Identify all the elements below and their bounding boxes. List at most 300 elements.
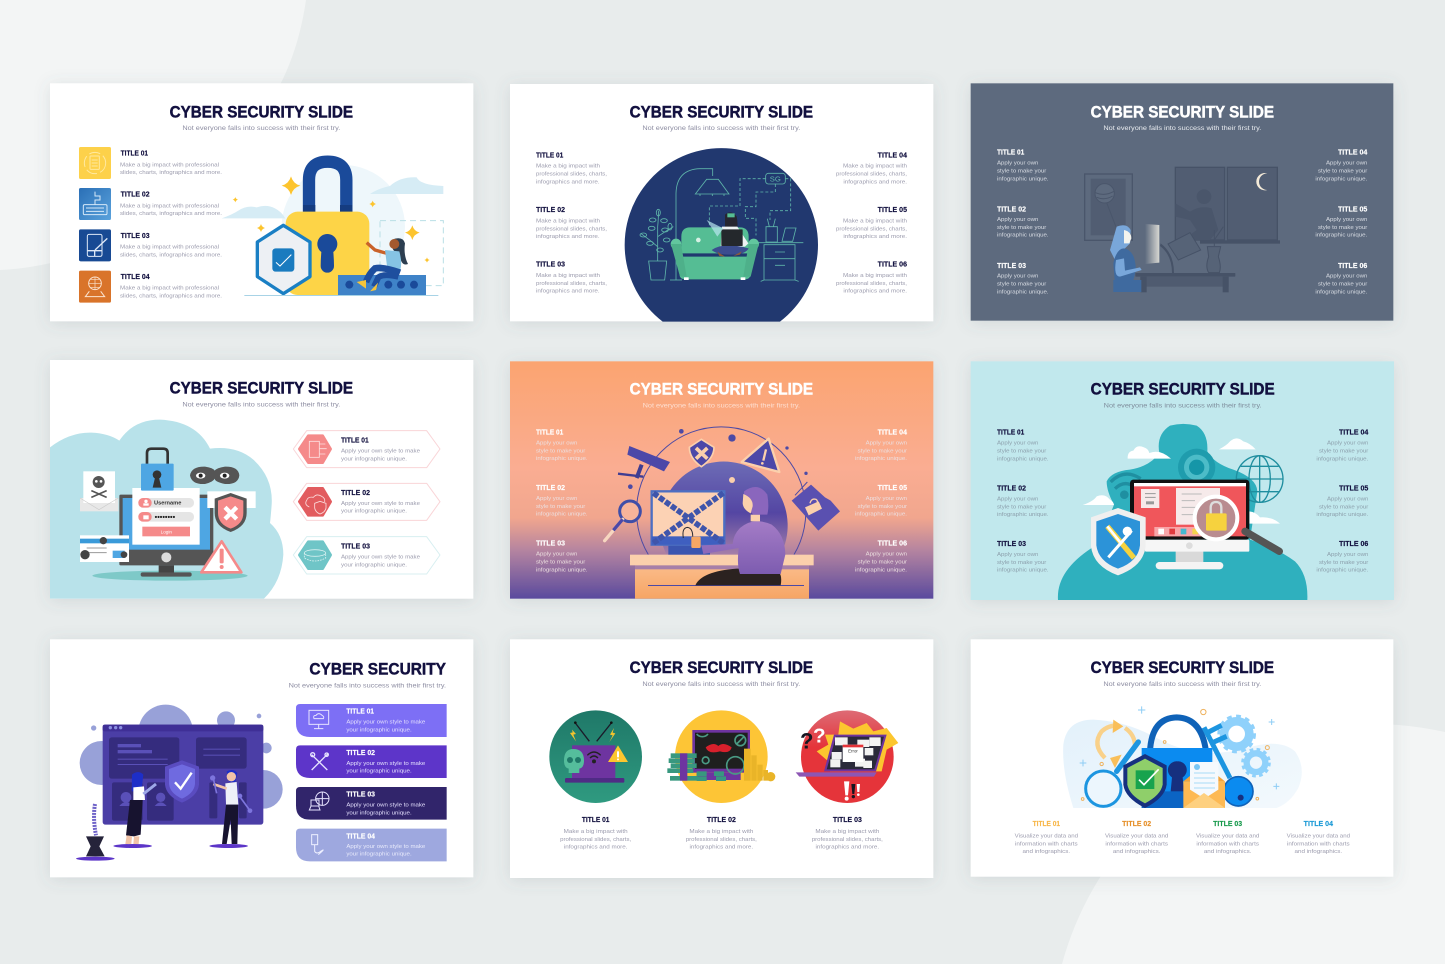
- item 03: style to make your: [536, 560, 585, 566]
- column 1 text: [1015, 819, 1078, 855]
- item 03: Make a big impact with: [536, 273, 600, 279]
- padlock shackle: [309, 162, 346, 213]
- item 8-3 text: [812, 815, 883, 851]
- bar 2 text: [346, 748, 425, 775]
- item 8-1 text: [560, 815, 632, 851]
- item 05: [1315, 204, 1368, 239]
- illustration: monitor and hacker silhouette: [1058, 424, 1307, 600]
- item 2 text: slides, charts, infographics and more.: [120, 211, 222, 217]
- item 05: infographics and more.: [843, 234, 907, 240]
- item 03: [536, 260, 607, 295]
- item 1 text: slides, charts, infographics and more.: [120, 170, 222, 176]
- item 05: TITLE 05: [878, 483, 907, 492]
- item 01: style to make your: [536, 448, 585, 454]
- column 2 text: [1105, 819, 1168, 855]
- padlock: [141, 449, 174, 491]
- item 01: [997, 427, 1049, 462]
- security camera: [618, 446, 670, 478]
- left text column: [997, 427, 1049, 574]
- item 02: infographic unique.: [997, 233, 1049, 239]
- item 01: infographics and more.: [536, 179, 600, 185]
- bar 4 text: Apply your own style to make: [346, 844, 425, 850]
- item 05: style to make your: [1319, 504, 1368, 510]
- bar 2 text: Apply your own style to make: [346, 761, 425, 767]
- panel 5: orange gradient locked computer slide: [510, 361, 933, 599]
- item 03: infographic unique.: [536, 567, 588, 573]
- column 4 text: [1287, 819, 1350, 855]
- item 05: infographic unique.: [855, 512, 907, 518]
- item 06: style to make your: [1318, 282, 1367, 288]
- column 1 text: and infographics.: [1022, 849, 1071, 855]
- bar 4 text: your infographic unique.: [346, 852, 412, 858]
- desk: [1135, 243, 1235, 292]
- item 06: [836, 260, 907, 295]
- item 02: TITLE 02: [997, 483, 1026, 492]
- item 4 text: Make a big impact with professional: [120, 286, 219, 292]
- cycle arrows: [1097, 725, 1135, 758]
- warning triangle: [201, 541, 241, 572]
- panel 3 title: CYBER SECURITY SLIDE: [1091, 102, 1274, 121]
- item 03: Apply your own: [997, 274, 1038, 280]
- item 01: style to make your: [997, 449, 1046, 455]
- panel 8: three circles slide: [510, 639, 933, 878]
- glowing screen: [1145, 224, 1159, 264]
- card 2 text: Apply your own style to make: [341, 501, 420, 507]
- man with pointer: [209, 770, 252, 848]
- column 1 text: information with charts: [1015, 841, 1078, 847]
- icon: crossed tools: [311, 753, 328, 770]
- item 8-3 text: Make a big impact with: [815, 829, 879, 835]
- item 06: infographics and more.: [843, 289, 907, 295]
- card 1 text: your infographic unique.: [341, 456, 407, 462]
- icon: tablet and pen: [79, 229, 111, 261]
- item 8-2 text: infographics and more.: [689, 845, 754, 851]
- item 03: style to make your: [997, 560, 1046, 566]
- column 2 text: TITLE 02: [1122, 819, 1151, 828]
- crossed chains: [653, 493, 723, 543]
- bar 1 text: [346, 706, 425, 733]
- item 1 text: [120, 149, 222, 176]
- card 3 text: TITLE 03: [341, 542, 370, 551]
- circle 1: infected router: [549, 710, 642, 803]
- panel 7: purple dashboard slide: [50, 639, 473, 877]
- card 3 text: [341, 542, 420, 568]
- item 02: infographic unique.: [997, 512, 1049, 518]
- panel 8 subtitle: Not everyone falls into success with their first try.: [642, 681, 800, 688]
- item 01: Apply your own: [536, 440, 577, 446]
- warning triangle: [742, 439, 779, 472]
- card 2 text: your infographic unique.: [341, 509, 407, 515]
- icon: globe hologram: [79, 271, 111, 303]
- left text column: [536, 427, 588, 573]
- item 02: professional slides, charts,: [536, 226, 607, 232]
- panel 9: blue padlock and key slide: [971, 639, 1393, 877]
- item 05: TITLE 05: [878, 205, 907, 214]
- left text column: [997, 148, 1049, 295]
- item 05: TITLE 05: [1339, 483, 1368, 492]
- item 01: TITLE 01: [536, 427, 563, 436]
- column 3 text: Visualize your data and: [1196, 833, 1259, 839]
- panel 6: teal silhouette monitor slide: [971, 361, 1394, 600]
- item 04: professional slides, charts,: [836, 172, 907, 178]
- item 03: Apply your own: [997, 552, 1038, 558]
- bar 1: [296, 704, 447, 737]
- item 05: professional slides, charts,: [836, 226, 907, 232]
- panel 2: woman on sofa slide: [510, 84, 933, 322]
- illustration: dashboard with people: [76, 705, 283, 861]
- infected card: [80, 535, 129, 562]
- panel 3 subtitle: Not everyone falls into success with their first try.: [1103, 125, 1261, 132]
- potted plant: [76, 804, 115, 861]
- item 06: Apply your own: [1326, 274, 1367, 280]
- column 3 text: TITLE 03: [1213, 819, 1242, 828]
- column 2 text: information with charts: [1105, 841, 1168, 847]
- panel 1 title: CYBER SECURITY SLIDE: [170, 102, 353, 121]
- item 06: Apply your own: [1327, 552, 1368, 558]
- item 2 text: Make a big impact with professional: [120, 203, 219, 209]
- item 02: infographics and more.: [536, 234, 600, 240]
- item 04: infographic unique.: [1316, 456, 1369, 462]
- item 02: infographic unique.: [536, 512, 588, 518]
- item 04: infographic unique.: [1315, 176, 1368, 182]
- padlock body: [286, 212, 369, 295]
- column 3 text: information with charts: [1196, 841, 1259, 847]
- item 2 text: TITLE 02: [121, 190, 150, 199]
- item 05: Apply your own: [1326, 217, 1367, 223]
- illustration: chained computer: [605, 427, 840, 599]
- card 1 text: Apply your own style to make: [341, 449, 420, 455]
- item 03: TITLE 03: [536, 260, 565, 269]
- item 06: professional slides, charts,: [836, 281, 907, 287]
- item 06: TITLE 06: [1339, 539, 1368, 548]
- item 8-2 text: [686, 815, 757, 851]
- woman with laptop: [707, 212, 749, 257]
- item 04: Apply your own: [1327, 441, 1368, 447]
- bar 3 text: TITLE 03: [346, 790, 375, 799]
- item 02: Apply your own: [997, 496, 1038, 502]
- picture frame: [1085, 174, 1132, 240]
- right text column: [1315, 148, 1368, 295]
- circle 3: error laptop: [796, 710, 898, 803]
- shield with check: [165, 760, 199, 803]
- bar 1 text: your infographic unique.: [346, 727, 412, 733]
- bar 1 text: Apply your own style to make: [346, 720, 425, 726]
- shield with tools: [1091, 508, 1146, 575]
- column 2 text: Visualize your data and: [1105, 833, 1168, 839]
- item 02: TITLE 02: [536, 205, 565, 214]
- panel 4 subtitle: Not everyone falls into success with their first try.: [182, 402, 340, 409]
- item 04: style to make your: [1319, 449, 1368, 455]
- desk: [630, 555, 814, 599]
- bar 2 text: TITLE 02: [346, 748, 375, 757]
- item 1 text: TITLE 01: [121, 149, 148, 158]
- column 4 text: TITLE 04: [1304, 819, 1334, 828]
- item 01: TITLE 01: [997, 427, 1024, 436]
- item 3 text: TITLE 03: [121, 231, 150, 240]
- panel 4: login and threats slide: [50, 360, 473, 599]
- password bar: [338, 275, 426, 295]
- item 04: [836, 150, 908, 185]
- item 04: TITLE 04: [878, 427, 908, 436]
- item 01: infographic unique.: [997, 456, 1049, 462]
- item 4 text: TITLE 04: [121, 272, 151, 281]
- item 01: infographic unique.: [997, 176, 1049, 182]
- column 2 text: and infographics.: [1113, 849, 1161, 855]
- item 03: infographics and more.: [536, 289, 600, 295]
- item 06: TITLE 06: [878, 260, 907, 269]
- illustration: burglar at window: [1085, 167, 1280, 292]
- icon: document cycle: [79, 147, 111, 179]
- panel 6 subtitle: Not everyone falls into success with their first try.: [1104, 403, 1262, 410]
- item 01: style to make your: [997, 168, 1046, 174]
- burglar: [1175, 189, 1218, 240]
- item 04: Apply your own: [1326, 161, 1367, 167]
- card 2 text: TITLE 02: [341, 488, 370, 497]
- item 06: Make a big impact with: [843, 273, 907, 279]
- card 2: [293, 483, 440, 520]
- panel 1 subtitle: Not everyone falls into success with their first try.: [182, 125, 340, 132]
- item 1 text: Make a big impact with professional: [120, 162, 219, 168]
- card 1 text: [341, 436, 420, 462]
- item 8-3 text: TITLE 03: [833, 815, 862, 824]
- item 3 text: slides, charts, infographics and more.: [120, 252, 222, 258]
- circle 2: ransomware laptop: [667, 710, 775, 803]
- item 03: professional slides, charts,: [536, 281, 607, 287]
- item 06: infographic unique.: [855, 567, 907, 573]
- item 05: [836, 205, 907, 240]
- item 8-2 text: Make a big impact with: [689, 829, 753, 835]
- item 06: style to make your: [858, 560, 907, 566]
- monitor: [1130, 480, 1249, 569]
- column 1 text: TITLE 01: [1033, 819, 1060, 828]
- card 3 text: Apply your own style to make: [341, 555, 420, 561]
- padlock: [1142, 717, 1212, 808]
- magnifier: [1086, 742, 1138, 806]
- item 04: TITLE 04: [1339, 427, 1369, 436]
- magnifier with padlock: [1195, 497, 1279, 551]
- item 02: Apply your own: [997, 217, 1038, 223]
- item 02: style to make your: [997, 504, 1046, 510]
- woman: [357, 238, 408, 291]
- keyhole: [317, 234, 337, 273]
- woman at computer: [1110, 225, 1142, 292]
- column 3 text: [1196, 819, 1259, 855]
- item 8-1 text: TITLE 01: [582, 815, 609, 824]
- panel 9 subtitle: Not everyone falls into success with their first try.: [1103, 681, 1261, 688]
- item 05: Apply your own: [1327, 496, 1368, 502]
- item list: [79, 147, 222, 303]
- username label: Username: [154, 501, 181, 507]
- item 01: TITLE 01: [536, 150, 563, 159]
- item 04: Make a big impact with: [843, 164, 907, 170]
- item 03: TITLE 03: [536, 539, 565, 548]
- item 06: infographic unique.: [1316, 568, 1369, 574]
- item 02: [536, 483, 588, 518]
- panel 5 title: CYBER SECURITY SLIDE: [630, 380, 813, 399]
- item 01: TITLE 01: [997, 148, 1024, 157]
- item 06: TITLE 06: [878, 539, 907, 548]
- item 01: [536, 150, 607, 185]
- item 03: style to make your: [997, 282, 1046, 288]
- shield with x: [207, 491, 256, 532]
- item 02: [997, 204, 1049, 239]
- window: [1175, 167, 1280, 244]
- woman with tablet: [113, 772, 156, 848]
- item 3 text: [120, 231, 222, 258]
- item 05: TITLE 05: [1338, 204, 1367, 213]
- panel 1: padlock slide with icon list: [50, 83, 473, 321]
- item 06: infographic unique.: [1315, 289, 1368, 295]
- item 8-1 text: Make a big impact with: [564, 829, 628, 835]
- item 03: TITLE 03: [997, 539, 1026, 548]
- envelope and letter: [1183, 762, 1225, 808]
- item 8-2 text: TITLE 02: [707, 815, 736, 824]
- icon: usb cable: [312, 835, 323, 855]
- room line art: [640, 169, 803, 281]
- item 02: Make a big impact with: [536, 219, 600, 225]
- bar 3 text: [346, 790, 425, 816]
- icon: keyboard: [79, 188, 111, 220]
- item 05: Make a big impact with: [843, 219, 907, 225]
- computer: [652, 491, 724, 555]
- column 4 text: Visualize your data and: [1287, 833, 1350, 839]
- bar 3: [296, 787, 447, 820]
- item 8-2 text: professional slides, charts,: [686, 837, 757, 843]
- item 8-3 text: infographics and more.: [815, 845, 880, 851]
- item 05: [855, 483, 907, 518]
- item 02: TITLE 02: [536, 483, 565, 492]
- item 01: [536, 427, 588, 462]
- item 04: infographics and more.: [843, 179, 907, 185]
- item 02: [536, 205, 607, 240]
- item 02: style to make your: [997, 225, 1046, 231]
- moon: [1256, 173, 1267, 190]
- item 06: [855, 539, 907, 573]
- item 03: Apply your own: [536, 552, 577, 558]
- question marks: ?: [800, 729, 813, 754]
- item 06: Apply your own: [866, 552, 907, 558]
- item 01: [997, 148, 1049, 182]
- bar 1 text: TITLE 01: [346, 706, 374, 715]
- item 04: TITLE 04: [878, 150, 908, 159]
- panel 9 title: CYBER SECURITY SLIDE: [1091, 658, 1274, 677]
- bar 3 text: Apply your own style to make: [346, 803, 425, 809]
- illustration: padlock, shield and woman: [222, 162, 443, 296]
- bar 4 text: [346, 831, 425, 858]
- panel 7 subtitle: Not everyone falls into success with their first try.: [289, 683, 446, 690]
- item 04: infographic unique.: [855, 456, 907, 462]
- item 05: style to make your: [858, 504, 907, 510]
- icon: cloud shield hexagon: [299, 488, 331, 515]
- shield: [1123, 754, 1167, 808]
- column 3 text: and infographics.: [1204, 849, 1252, 855]
- bar 2 text: your infographic unique.: [346, 769, 412, 775]
- right text column: [855, 427, 908, 573]
- icon: circuit hexagon: [299, 436, 331, 463]
- open padlock: [683, 527, 701, 548]
- item 03: [997, 261, 1049, 295]
- item 04: style to make your: [858, 448, 907, 454]
- illustration: blue cloud with computer: [50, 420, 283, 599]
- item 03: [536, 539, 588, 573]
- green sofa: [671, 227, 759, 280]
- bar 2: [296, 745, 447, 778]
- bar 3 text: your infographic unique.: [346, 810, 412, 816]
- item 3 text: Make a big impact with professional: [120, 245, 219, 251]
- item 02: TITLE 02: [997, 204, 1026, 213]
- panel 4 title: CYBER SECURITY SLIDE: [170, 379, 353, 398]
- login card: [132, 488, 200, 545]
- item 04: TITLE 04: [1338, 148, 1368, 157]
- card 1: [293, 431, 440, 468]
- item 4 text: slides, charts, infographics and more.: [120, 293, 222, 299]
- left text column: [536, 150, 607, 295]
- right text column: [1316, 427, 1369, 574]
- panel 2 title: CYBER SECURITY SLIDE: [630, 102, 813, 121]
- icon: firewall hexagon: [299, 542, 331, 569]
- bar 4: [296, 829, 447, 861]
- item 8-1 text: professional slides, charts,: [560, 837, 632, 843]
- clouds: [1083, 438, 1280, 524]
- error label: Error: [848, 749, 858, 754]
- item 8-3 text: professional slides, charts,: [812, 837, 883, 843]
- target circle: [1178, 449, 1215, 486]
- column 4 text: information with charts: [1287, 841, 1350, 847]
- background blob bottom right: [1062, 724, 1445, 964]
- item 04: [855, 427, 908, 462]
- icon: globe and laptop: [309, 792, 329, 810]
- item 01: professional slides, charts,: [536, 172, 607, 178]
- item 01: infographic unique.: [536, 456, 588, 462]
- item 01: Apply your own: [997, 161, 1038, 167]
- monitor: [119, 495, 213, 577]
- item 2 text: [120, 190, 222, 217]
- item 06: TITLE 06: [1338, 261, 1367, 270]
- item 05: style to make your: [1318, 225, 1367, 231]
- stolen laptop and plant: [1168, 227, 1223, 273]
- item 06: style to make your: [1319, 560, 1368, 566]
- exclamation marks: [844, 781, 860, 801]
- card 1 text: TITLE 01: [341, 436, 369, 445]
- item 02: [997, 483, 1049, 518]
- small decorations: [1080, 706, 1279, 789]
- item 03: infographic unique.: [997, 289, 1049, 295]
- magnifier: [605, 501, 640, 541]
- password dots: ••••••••: [155, 512, 176, 521]
- item 05: [1316, 483, 1369, 518]
- item 04: [1316, 427, 1369, 462]
- text on sign: SG: [770, 174, 781, 183]
- item 03: infographic unique.: [997, 568, 1049, 574]
- item 05: infographic unique.: [1315, 233, 1368, 239]
- item 03: [997, 539, 1049, 574]
- item 05: infographic unique.: [1316, 512, 1369, 518]
- background blob top left: [0, 0, 306, 270]
- right text column: [836, 150, 908, 295]
- item 02: style to make your: [536, 504, 585, 510]
- panel 5 subtitle: Not everyone falls into success with their first try.: [643, 402, 800, 409]
- illustration: padlock, key, shield, magnifier: [1063, 706, 1302, 808]
- sparkles: [233, 176, 430, 263]
- card 3: [293, 537, 440, 574]
- gears: [1219, 717, 1269, 776]
- item 04: style to make your: [1318, 168, 1367, 174]
- second question mark: ?: [813, 725, 826, 748]
- bar 4 text: TITLE 04: [346, 831, 376, 840]
- item 06: [1315, 261, 1368, 295]
- item 04: [1315, 148, 1368, 182]
- column 4 text: and infographics.: [1294, 849, 1343, 855]
